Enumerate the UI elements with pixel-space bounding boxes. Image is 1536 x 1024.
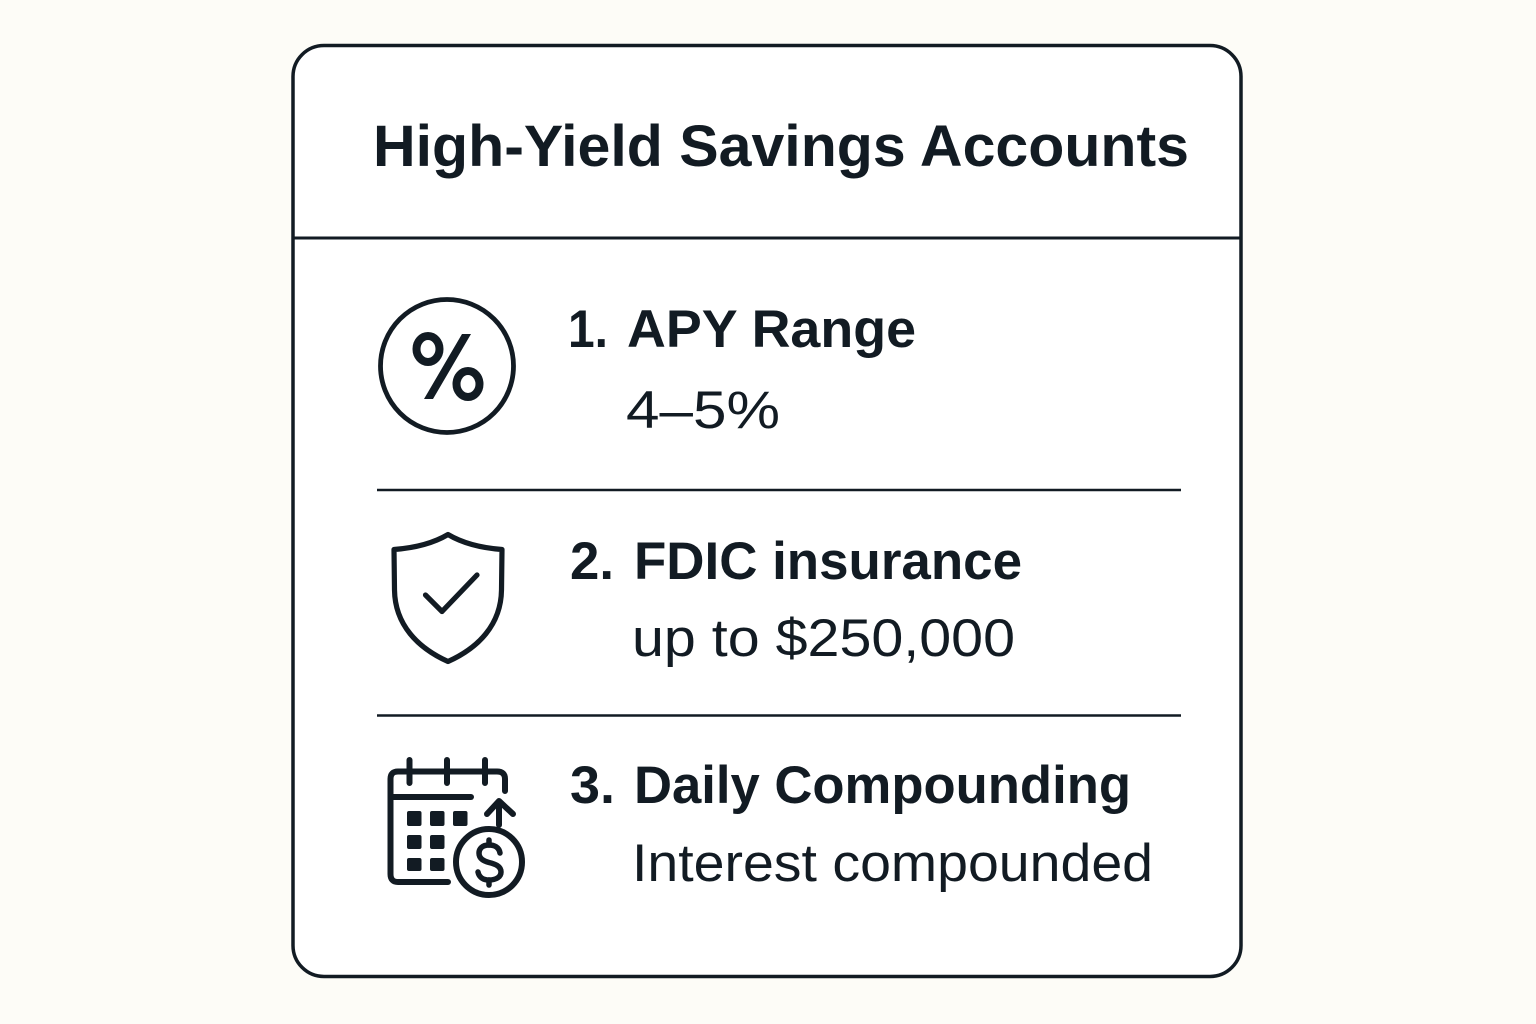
icon: shield with check <box>394 534 502 662</box>
icon: calendar with dollar coin <box>390 760 522 895</box>
heading: FDIC insurance: FDIC insurance <box>634 532 1022 591</box>
text: FDIC value: up to $250,000 <box>632 609 1015 668</box>
icon: percent <box>380 300 514 432</box>
heading: Daily Compounding: Daily Compounding <box>634 756 1131 815</box>
heading: APY Range: 1. <box>568 300 608 359</box>
heading: Daily Compounding: 3. <box>570 756 615 815</box>
heading: APY Range: APY Range <box>627 300 916 359</box>
text: APY value: 4–5% <box>626 381 780 440</box>
title: High-Yield Savings Accounts <box>373 114 1189 179</box>
heading: FDIC insurance: 2. <box>570 532 614 591</box>
text: compounding value: Interest compounded <box>632 834 1153 893</box>
panel: card <box>293 46 1241 976</box>
